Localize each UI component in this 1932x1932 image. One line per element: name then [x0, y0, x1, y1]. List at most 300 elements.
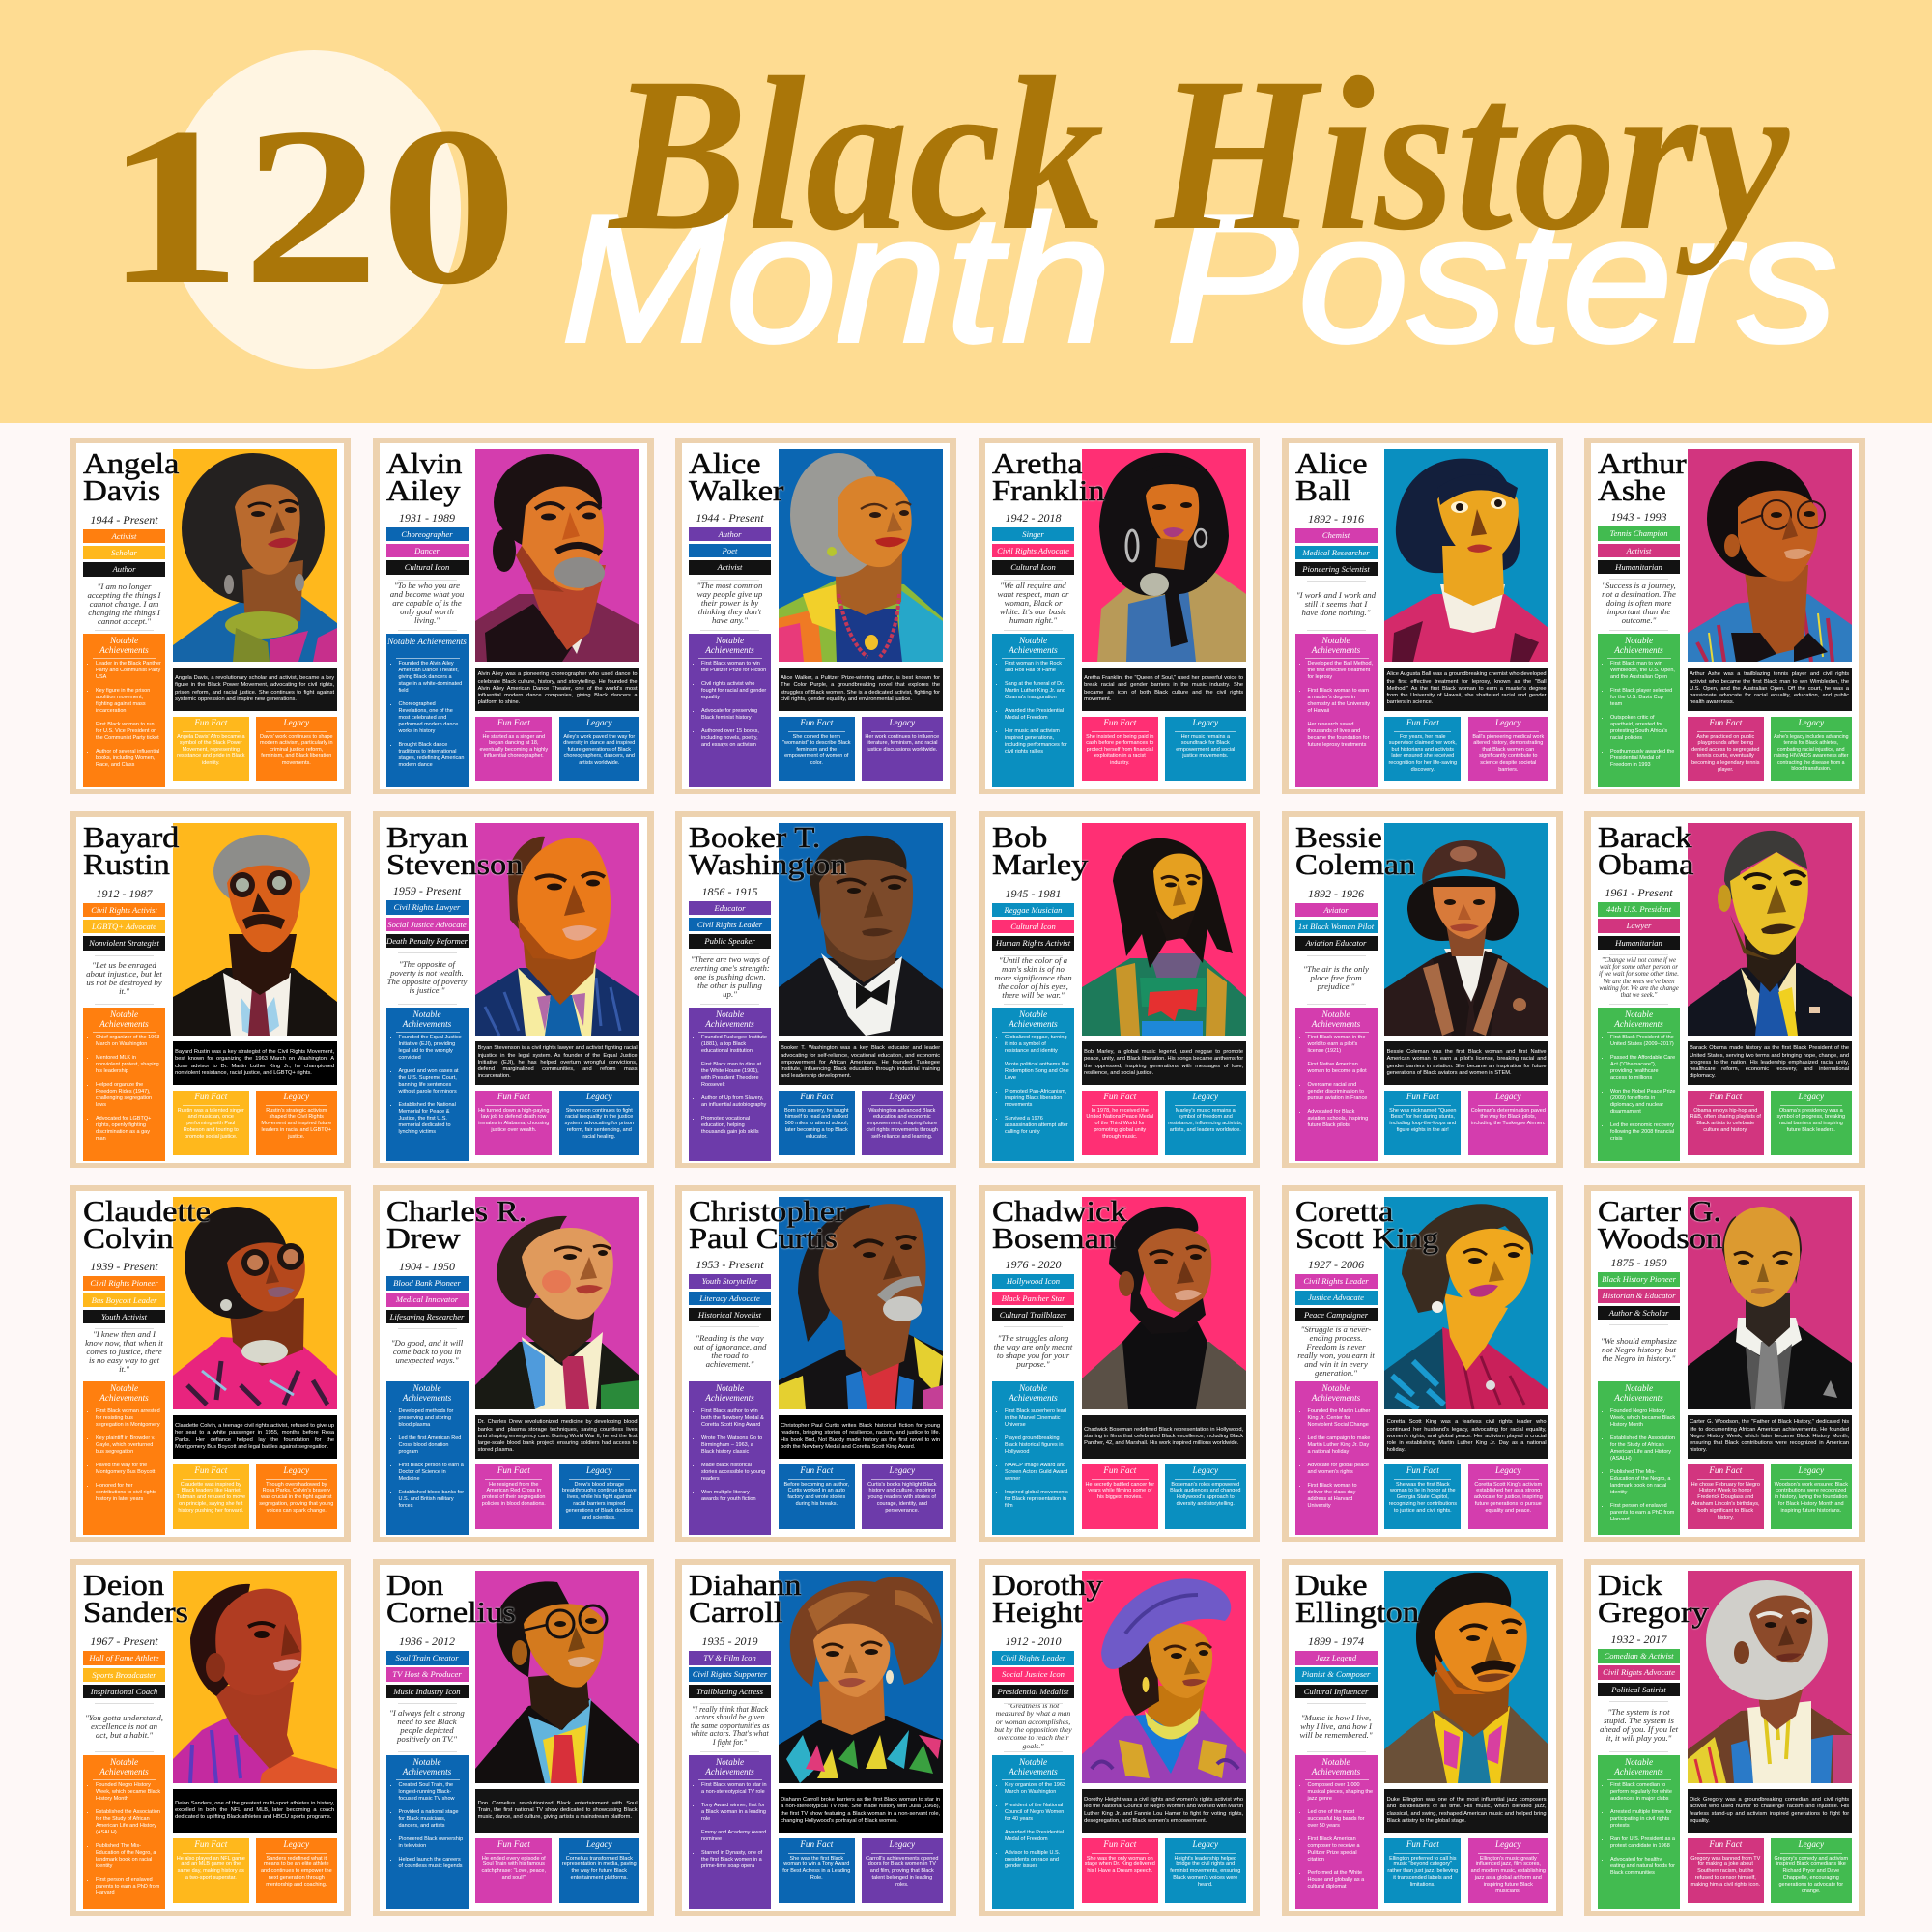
notable achievements: Notable — [1625, 1757, 1653, 1767]
role tags — [689, 527, 771, 575]
fun fact: In 1978, he received the United Nations Peace Medal of the Third World for promoting global unity through music. — [1086, 1107, 1153, 1140]
notable achievements: First Black woman to star in a non-stereotypical TV role — [701, 1781, 767, 1795]
notable achievements: First Black President of the United States (2009–2017) — [1610, 1034, 1674, 1047]
name: Barack — [1598, 820, 1691, 854]
biography: Coretta Scott King was a fearless civil rights leader who continued her husband's legacy, advocating for racial equality, women's rights, and global peace. Her activism played a crucial role in establishing Martin Luther King Jr. Day as a national holiday. — [1387, 1419, 1547, 1453]
notable achievements: Notable — [716, 636, 744, 645]
role tags: Bus Boycott Leader — [92, 1295, 156, 1305]
poster: Chadwick Boseman — [979, 1185, 1260, 1542]
portrait: Diahann Carroll — [779, 1571, 943, 1783]
biography: Duke Ellington was one of the most influential jazz composers and bandleaders of all time. His music, which blended jazz, classical, and swing, reshaped American music and helped bring Black artistry to the global stage. — [1387, 1797, 1547, 1824]
fun fact: Fun Fact — [194, 1839, 227, 1849]
legacy: Legacy — [284, 1839, 309, 1849]
role tags — [386, 1276, 469, 1323]
role tags — [83, 1651, 165, 1698]
legacy: Drew's blood storage breakthroughs continue to save lives, while his fight against racial barriers inspired generations of Black doctors and scientists. — [562, 1482, 637, 1520]
notable achievements — [83, 1755, 165, 1909]
notable achievements: Notable — [716, 1757, 744, 1767]
legacy: Coleman's determination paved the way for Black pilots, including the Tuskegee Airmen. — [1471, 1107, 1546, 1126]
biography — [173, 1415, 337, 1459]
dates: 1942 - 2018 — [1005, 510, 1061, 524]
notable achievements: Made Black historical stories accessible to young readers — [701, 1463, 765, 1482]
notable achievements: Achievements — [1312, 1018, 1360, 1028]
notable achievements: Achievements — [403, 1766, 451, 1776]
role tags — [1598, 902, 1680, 950]
legacy: Legacy — [890, 1465, 915, 1475]
poster: Bessie Coleman — [1281, 811, 1563, 1168]
name: Deion — [83, 1568, 164, 1602]
fun fact: Fun Fact — [194, 718, 227, 727]
quote: "We all require and want respect, man or woman, Black or white. It's our basic human right." — [998, 581, 1068, 625]
notable achievements: Sang at the funeral of Dr. Martin Luther King Jr. and Obama's inauguration — [1005, 680, 1065, 699]
name — [992, 820, 1090, 881]
poster: Deion Sanders — [70, 1559, 351, 1916]
legacy: Legacy — [1799, 1839, 1824, 1849]
name: Bob — [992, 820, 1047, 854]
legacy: Rustin's strategic activism shaped the Civil Rights Movement and inspired future leaders in racial and LGBTQ+ justice. — [261, 1107, 331, 1140]
name — [1598, 1572, 1697, 1625]
name — [1294, 1572, 1406, 1625]
name: Christopher — [689, 1194, 845, 1228]
notable achievements: Key organizer of the 1963 March on Washington — [1005, 1781, 1065, 1795]
fun fact: She was the first Black woman to lie in honor at the Georgia State Capitol, recognizing her contributions to justice and civil rights. — [1389, 1482, 1457, 1514]
legacy: Marley's music remains a symbol of freedom and resistance, influencing activists, artists, and leaders worldwide. — [1168, 1107, 1242, 1133]
notable achievements: First Black person to earn a Doctor of Science in Medicine — [398, 1463, 464, 1482]
name: Rustin — [83, 846, 170, 881]
name: Alice — [1294, 446, 1367, 480]
notable achievements: Mentored MLK in nonviolent protest, shaping his leadership — [96, 1055, 159, 1074]
name: Drew — [386, 1221, 460, 1254]
biography: Alice Walker, a Pulitzer Prize-winning author, is best known for The Color Purple, a groundbreaking novel that explores the struggles of Black women. She is a dedicated activist, fighting for civil rights, gender equality, and environmental justice. — [781, 675, 940, 702]
header banner — [0, 0, 1932, 423]
notable achievements: Ran for U.S. President as a protest candidate in 1968 — [1610, 1835, 1675, 1849]
dates: 1912 - 2010 — [1005, 1634, 1061, 1648]
notable achievements: Chief organizer of the 1963 March on Washington — [96, 1034, 159, 1047]
biography: Bryan Stevenson is a civil rights lawyer and activist fighting racial injustice in the legal system. As founder of the Equal Justice Initiative (EJI), he has helped overturn wrongful convictions, defend marginalized communities, and reform mass incarceration. — [478, 1045, 638, 1079]
biography — [1688, 1789, 1852, 1833]
notable achievements: Inspired global movements for Black representation in film — [1005, 1490, 1068, 1509]
fun fact: Ashe practiced on public playgrounds after being denied access to segregated tennis courts, eventually becoming a legendary tennis player. — [1691, 734, 1759, 773]
name: Dorothy — [992, 1568, 1103, 1602]
notable achievements: Wrote The Watsons Go to Birmingham – 1963, a Black history classic — [701, 1435, 762, 1455]
notable achievements: Helped launch the careers of countless music legends — [398, 1857, 463, 1868]
notable achievements: Notable — [110, 1383, 138, 1393]
role tags: Author — [719, 529, 741, 539]
legacy: Obama's presidency was a symbol of progress, breaking racial barriers and inspiring future Black leaders. — [1776, 1107, 1845, 1133]
role tags: Civil Rights Pioneer — [90, 1278, 158, 1288]
biography: Carter G. Woodson, the "Father of Black History," dedicated his life to documenting African American achievements. He founded Negro History Week, which later became Black History Month, ensuring that Black contributions were recognized in American history. — [1690, 1419, 1849, 1453]
legacy: Legacy — [1193, 718, 1218, 727]
name: Claudette — [83, 1194, 211, 1228]
role tags — [689, 1651, 771, 1701]
role tags: Tennis Champion — [1609, 528, 1668, 538]
fun fact: Rustin was a talented singer and musician, once performing with Paul Robeson and touring to promote social justice. — [178, 1107, 244, 1140]
legacy: Legacy — [586, 1839, 612, 1849]
role tags: Cultural Icon — [1010, 562, 1056, 572]
notable achievements: Achievements — [1614, 645, 1663, 655]
notable achievements: Established the National Memorial for Peace & Justice, the first U.S. memorial dedicated to lynching victims — [398, 1101, 456, 1134]
role tags — [83, 903, 165, 951]
poster: Duke Ellington — [1281, 1559, 1563, 1916]
role tags: Hall of Fame Athlete — [89, 1653, 159, 1662]
name: Bayard — [83, 820, 179, 854]
notable achievements — [992, 634, 1074, 787]
name — [688, 820, 848, 883]
role tags: Aviation Educator — [1306, 938, 1366, 948]
notable achievements — [689, 1755, 771, 1909]
role tags: Humanitarian — [1615, 938, 1662, 948]
quote: "I really think that Black actors should be given the same opportunities as white actors. That's what I fight for." — [690, 1705, 769, 1747]
biography: Deion Sanders, one of the greatest multi-sport athletes in history, excelled in both the NFL and MLB, later becoming a coach dedicated to uplifting Black athletes and HBCU sports programs. — [175, 1801, 334, 1820]
notable achievements: Globalized reggae, turning it into a symbol of resistance and identity — [1005, 1034, 1067, 1053]
notable achievements: Posthumously awarded the Presidential Medal of Freedom in 1993 — [1610, 748, 1674, 767]
poster: Alice Walker — [675, 438, 956, 794]
notable achievements — [386, 634, 468, 787]
legacy: Ailey's work paved the way for diversity in dance and inspired future generations of Black choreographers, dancers, and artists worldwide. — [563, 734, 635, 766]
biography — [475, 1789, 639, 1833]
role tags: Historical Novelist — [698, 1310, 761, 1320]
legacy — [862, 717, 943, 781]
fun fact — [1082, 717, 1158, 781]
dates: 1945 - 1981 — [1005, 887, 1061, 900]
notable achievements — [992, 1381, 1074, 1535]
legacy: Legacy — [284, 1465, 309, 1475]
notable achievements: Emmy and Academy Award nominee — [701, 1830, 766, 1841]
portrait: Christopher Paul Curtis — [779, 1197, 943, 1409]
legacy: Davis' work continues to shape modern activism, particularly in criminal justice reform, feminism, and Black liberation movements. — [260, 734, 333, 766]
biography — [173, 668, 337, 711]
biography: Aretha Franklin, the "Queen of Soul," used her powerful voice to break racial and gender barriers in the music industry. She became an icon of both Black culture and the civil rights movement. — [1084, 675, 1243, 702]
dates: 1976 - 2020 — [1005, 1258, 1061, 1271]
legacy: Ellington's music greatly influenced jazz, film scores, and modern music, establishing jazz as a global art form and inspiring future Black musicians. — [1471, 1855, 1546, 1894]
fun fact: He chose February for Negro History Week to honor Frederick Douglass and Abraham Lincoln's birthdays, both significant to Black history. — [1691, 1482, 1760, 1520]
name — [83, 446, 180, 506]
legacy — [1468, 1838, 1548, 1903]
role tags: 1st Black Woman Pilot — [1298, 922, 1374, 931]
legacy: Though overshadowed by Rosa Parks, Colvin's bravery was crucial in the fight against segregation, proving that young voices can spark change. — [259, 1482, 333, 1514]
notable achievements: Achievements — [705, 645, 754, 655]
biography: Diahann Carroll broke barriers as the first Black woman to star in a non-stereotypical TV role. She made history with Julia (1968), the first TV show featuring a Black woman in a non-servant role, changing Hollywood's portrayal of Black women. — [781, 1797, 940, 1824]
notable achievements: Passed the Affordable Care Act ("Obamacare"), providing healthcare access to millions — [1610, 1055, 1675, 1080]
role tags — [1598, 526, 1680, 574]
fun fact: Fun Fact — [800, 718, 833, 727]
legacy — [1468, 717, 1548, 781]
notable achievements: Notable — [1321, 1757, 1350, 1767]
name: Charles R. — [386, 1194, 526, 1228]
legacy — [256, 1838, 337, 1903]
notable achievements: Provided a national stage for Black musicians, dancers, and artists — [398, 1808, 459, 1828]
dates: 1892 - 1916 — [1308, 512, 1364, 526]
notable achievements: Advocate for preserving Black feminist history — [701, 707, 757, 721]
legacy — [1165, 1091, 1246, 1155]
biography — [173, 1789, 337, 1833]
fun fact: She was the first Black woman to win a Tony Award for Best Actress in a Leading Role. — [782, 1855, 850, 1881]
notable achievements: Performed at the White House and globally as a cultural diplomat — [1308, 1870, 1364, 1889]
legacy: Legacy — [890, 1092, 915, 1101]
notable achievements: Notable — [412, 1009, 441, 1019]
role tags: Cultural Icon — [1010, 922, 1056, 931]
name — [689, 1572, 790, 1625]
notable achievements: Founded the Alvin Ailey American Dance Theater, giving Black dancers a stage in a white-dominated field — [398, 661, 462, 694]
name: Ball — [1294, 473, 1350, 506]
role tags: Blood Bank Pioneer — [393, 1278, 461, 1288]
role tags: Youth Activist — [101, 1312, 147, 1321]
portrait: Deion Sanders — [173, 1571, 337, 1783]
fun fact — [1688, 1464, 1764, 1528]
role tags: Scholar — [111, 548, 137, 557]
fun fact: For years, her male supervisor claimed her work, but historians and activists later ensured she received recognition for her life-saving discovery. — [1388, 734, 1457, 773]
notable achievements — [386, 1381, 468, 1535]
notable achievements: Created Soul Train, the longest-running Black-focused music TV show — [398, 1781, 454, 1801]
fun fact — [1688, 1838, 1764, 1903]
name — [83, 1568, 189, 1629]
notable achievements: Notable — [412, 1757, 441, 1767]
notable achievements: Achievements — [1312, 1766, 1360, 1776]
legacy — [558, 1464, 639, 1528]
poster: Arthur Ashe — [1584, 438, 1865, 794]
portrait: Duke Ellington — [1384, 1571, 1548, 1783]
role tags: Author — [113, 564, 135, 574]
name: Coretta — [1294, 1194, 1393, 1228]
role tags: Nonviolent Strategist — [89, 938, 159, 948]
name — [1294, 820, 1416, 881]
biography: Alvin Ailey was a pioneering choreographer who used dance to celebrate Black culture, history, and storytelling. He founded the Alvin Ailey American Dance Theater, one of the world's most influential modern dance companies, giving Black dancers a platform to shine. — [478, 671, 638, 705]
role tags: Literacy Advocate — [699, 1293, 760, 1303]
biography — [1082, 1415, 1246, 1459]
role tags: Peace Campaigner — [1304, 1310, 1368, 1320]
legacy — [1468, 1464, 1548, 1528]
name: Don — [386, 1568, 443, 1602]
notable achievements — [689, 634, 771, 787]
role tags: Pianist & Composer — [1302, 1669, 1370, 1679]
notable achievements: First Black comedian to perform regularly for white audiences in major clubs — [1610, 1781, 1672, 1801]
portrait: Angela Davis — [173, 449, 337, 662]
portrait: Dorothy Height — [1082, 1571, 1246, 1783]
name: Coleman — [1294, 846, 1415, 881]
legacy: Legacy — [1495, 1092, 1521, 1101]
fun fact: Fun Fact — [1406, 1092, 1439, 1101]
quote: "The system is not stupid. The system is ahead of you. If you let it, it will play you." — [1600, 1707, 1678, 1743]
name — [992, 446, 1105, 506]
poster: Dick Gregory — [1584, 1559, 1865, 1916]
fun fact: Fun Fact — [497, 1465, 530, 1475]
name: Alice — [689, 446, 761, 480]
portrait: Bryan Stevenson — [475, 823, 639, 1036]
role tags: Social Justice Advocate — [387, 920, 467, 929]
legacy: Ball's pioneering medical work altered history, demonstrating that Black women can significantly contribute to science despite societal barriers. — [1472, 734, 1544, 773]
poster: Charles R. Drew — [373, 1185, 653, 1542]
notable achievements: Achievements — [1614, 1766, 1663, 1776]
notable achievements: Tony Award winner, first for a Black woman in a leading role — [701, 1803, 766, 1822]
notable achievements: Achievements — [1009, 1393, 1058, 1403]
quote: "Struggle is a never-ending process. Freedom is never really won, you earn it and win it in every generation." — [1297, 1323, 1375, 1378]
notable achievements: Notable — [1625, 1009, 1653, 1019]
legacy: Height's leadership helped bridge the civil rights and feminist movements, ensuring Black women's voices were heard. — [1170, 1855, 1240, 1888]
notable achievements: Published The Mis-Education of the Negro, a landmark book on racial identity — [96, 1843, 156, 1868]
notable achievements: Helped organize the Freedom Rides (1947), challenging segregation laws — [96, 1082, 152, 1107]
role tags: Social Justice Icon — [1002, 1669, 1065, 1679]
poster: Christopher Paul Curtis — [675, 1185, 956, 1542]
legacy: Cornelius transformed Black representation in media, paving the way for future Black entertainment platforms. — [562, 1855, 637, 1881]
notable achievements: Outspoken critic of apartheid, arrested for protesting South Africa's racial policies — [1610, 715, 1667, 740]
dates: 1904 - 1950 — [399, 1260, 455, 1273]
notable achievements: Led the economic recovery following the 2008 financial crisis — [1610, 1122, 1674, 1142]
role tags: Civil Rights Supporter — [693, 1669, 767, 1679]
legacy — [1165, 1464, 1246, 1528]
notable achievements — [83, 1381, 165, 1535]
role tags: Medical Researcher — [1302, 548, 1370, 557]
dates: 1953 - Present — [696, 1258, 764, 1271]
biography: Claudette Colvin, a teenage civil rights activist, refused to give up her seat to a white passenger in 1955, months before Rosa Parks. Her defiance helped lay the foundation for the Montgomery Bus Boycott and legal battles against segregation. — [175, 1423, 334, 1450]
name: Angela — [83, 446, 179, 480]
fun fact: He turned down a high-paying law job to defend death row inmates in Alabama, choosing justice over wealth. — [478, 1107, 549, 1133]
notable achievements: Achievements — [403, 1018, 451, 1028]
biography: Don Cornelius revolutionized Black entertainment with Soul Train, the first national TV show dedicated to showcasing Black music, dance, and culture, giving artists a mainstream platform. — [478, 1801, 638, 1820]
fun fact: She coined the term "womanist" to describe Black feminism and the empowerment of women of color. — [782, 734, 851, 766]
portrait: Dick Gregory — [1688, 1571, 1852, 1783]
role tags: Pioneering Scientist — [1302, 564, 1370, 574]
notable achievements: Achievements — [1009, 1766, 1058, 1776]
legacy: Carroll's achievements opened doors for Black women in TV and film, proving that Black talent belonged in leading roles. — [866, 1855, 938, 1888]
fun fact: He started as a singer and began dancing at 18, eventually becoming a highly influential choreographer. — [479, 734, 548, 759]
biography — [1082, 1041, 1246, 1085]
role tags — [992, 1651, 1074, 1701]
biography: Bob Marley, a global music legend, used reggae to promote peace, unity, and Black liberation. His songs became anthems for the oppressed, inspiring generations with messages of love, resilience, and social justice. — [1084, 1049, 1243, 1076]
fun fact — [173, 1464, 249, 1528]
fun fact: Fun Fact — [1103, 1092, 1136, 1101]
name: Colvin — [83, 1221, 174, 1254]
quote: "Greatness is not measured by what a man or woman accomplishes, but by the opposition they overcome to reach their goals." — [994, 1701, 1072, 1750]
notable achievements: Notable — [1019, 1009, 1047, 1019]
poster: Bob Marley — [979, 811, 1260, 1168]
name: Height — [992, 1594, 1083, 1629]
quote: "We should emphasize not Negro history, but the Negro in history." — [1601, 1336, 1677, 1363]
fun fact: Fun Fact — [194, 1465, 227, 1475]
name — [83, 820, 180, 881]
notable achievements: First Black woman to win the Pulitzer Prize for Fiction — [701, 661, 766, 672]
name — [688, 446, 785, 506]
dates: 1932 - 2017 — [1611, 1633, 1667, 1646]
notable achievements: Starred in Dynasty, one of the first Black women in a prime-time soap opera — [701, 1849, 762, 1868]
legacy — [862, 1091, 943, 1155]
name: Ailey — [386, 473, 460, 506]
fun fact: She insisted on being paid in cash before performances to protect herself from financial exploitation in a racist industry. — [1086, 734, 1153, 766]
biography: Dorothy Height was a civil rights and women's rights activist who led the National Council of Negro Women and worked with Martin Luther King Jr. and Fannie Lou Hamer to fight for voting rights, desegregation, and Black women's empowerment. — [1084, 1797, 1243, 1824]
name: Bessie — [1294, 820, 1381, 854]
notable achievements: Awarded the Presidential Medal of Freedom — [1005, 707, 1064, 721]
notable achievements: Led one of the most successful big bands for over 50 years — [1308, 1808, 1365, 1828]
dates: 1959 - Present — [393, 884, 461, 897]
biography: Chadwick Boseman redefined Black representation in Hollywood, starring in films that celebrated Black excellence, including Black Panther, 42, and Marshall. His work inspired millions worldwide. — [1084, 1427, 1243, 1446]
name: Davis — [83, 473, 160, 506]
fun fact — [475, 1838, 552, 1903]
legacy — [1165, 1838, 1246, 1903]
legacy — [256, 1091, 337, 1155]
role tags: Youth Storyteller — [702, 1276, 757, 1286]
role tags: LGBTQ+ Advocate — [92, 922, 156, 931]
name: Stevenson — [386, 846, 523, 881]
poster: Bayard Rustin — [70, 811, 351, 1168]
quote: "You gotta understand, excellence is not an act, but a habit." — [85, 1713, 163, 1740]
notable achievements: Notable — [1019, 636, 1047, 645]
biography — [779, 1415, 943, 1459]
legacy: Legacy — [1495, 1839, 1521, 1849]
notable achievements: Notable — [1321, 1383, 1350, 1393]
notable achievements: First woman in the Rock and Roll Hall of Fame — [1005, 661, 1062, 672]
notable achievements — [83, 634, 165, 787]
poster: Barack Obama — [1584, 811, 1865, 1168]
fun fact — [173, 1091, 249, 1155]
notable achievements: Achievements — [99, 645, 149, 655]
dates: 1856 - 1915 — [701, 885, 757, 898]
notable achievements: Founded Negro History Week, which became Black History Month — [96, 1781, 160, 1801]
notable achievements — [386, 1008, 468, 1161]
notable achievements — [1294, 1008, 1378, 1161]
legacy: Legacy — [890, 718, 915, 727]
name: Franklin — [992, 473, 1105, 506]
fun fact — [1082, 1838, 1158, 1903]
biography — [1082, 1789, 1246, 1833]
poster: Aretha Franklin — [979, 438, 1260, 794]
name — [386, 446, 462, 507]
role tags: Trailblazing Actress — [696, 1687, 763, 1696]
poster: Don Cornelius — [373, 1559, 653, 1916]
role tags: Medical Innovator — [396, 1294, 458, 1304]
fun fact: Fun Fact — [1709, 1465, 1742, 1475]
fun fact: Fun Fact — [497, 1092, 530, 1101]
role tags — [83, 529, 165, 577]
legacy — [558, 1838, 639, 1903]
notable achievements: Brought Black dance traditions to international stages, redefining American modern dance — [398, 742, 464, 767]
biography: Christopher Paul Curtis writes Black historical fiction for young readers, bringing stories of resilience, racism, and justice to life. His book Bud, Not Buddy made history as the first novel to win both the Newbery Medal and Coretta Scott King Award. — [781, 1423, 940, 1450]
notable achievements: Published The Mis-Education of the Negro, a landmark book on racial identity — [1610, 1468, 1670, 1495]
fun fact: He resigned from the American Red Cross in protest of their segregation policies in blood donations. — [482, 1482, 546, 1507]
notable achievements: Notable — [716, 1009, 744, 1019]
notable achievements: Wrote political anthems like Redemption Song and One Love — [1005, 1061, 1069, 1080]
notable achievements: Developed the Ball Method, the first effective treatment for leprosy — [1308, 661, 1373, 680]
legacy: Legacy — [1193, 1839, 1218, 1849]
role tags: Civil Rights Leader — [1001, 1653, 1065, 1662]
legacy: Legacy — [586, 1465, 612, 1475]
legacy — [1771, 1091, 1852, 1155]
notable achievements: Founded Negro History Week, which became Black History Month — [1610, 1408, 1675, 1428]
notable achievements: Achievements — [1009, 1018, 1058, 1028]
biography: Booker T. Washington was a key Black educator and leader advocating for self-reliance, vocational education, and economic empowerment for African Americans. He founded Tuskegee Institute, influencing Black education through industrial training and leadership development. — [781, 1045, 940, 1079]
notable achievements: Her music and activism inspired generations, including performances for civil rights rallies — [1005, 728, 1067, 753]
legacy: Legacy — [1799, 718, 1824, 727]
notable achievements: Founded Tuskegee Institute (1881), a top Black educational institution — [701, 1034, 767, 1053]
name — [83, 1194, 211, 1254]
legacy: Legacy — [1193, 1465, 1218, 1475]
notable achievements — [689, 1381, 771, 1535]
notable achievements: NAACP Image Award and Screen Actors Guild Award winner — [1005, 1463, 1067, 1482]
name: Ellington — [1294, 1594, 1419, 1629]
name — [1598, 820, 1694, 881]
notable achievements — [1294, 1381, 1378, 1535]
notable achievements: Won multiple literary awards for youth fiction — [701, 1490, 756, 1501]
fun fact — [779, 1838, 855, 1903]
notable achievements: Established the Association for the Study of African American Life and History (ASALH) — [96, 1808, 160, 1835]
notable achievements: Led the first American Red Cross blood donation program — [398, 1435, 461, 1455]
notable achievements — [1598, 634, 1680, 787]
quote: "The most common way people give up their power is by thinking they don't have any." — [697, 581, 762, 625]
fun fact: He ended every episode of Soul Train with his famous catchphrase: "Love, peace, and soul!" — [482, 1855, 546, 1881]
role tags: TV & Film Icon — [703, 1653, 756, 1662]
notable achievements: Founded the Equal Justice Initiative (EJI), providing legal aid to the wrongly convicted — [398, 1034, 462, 1061]
fun fact: Fun Fact — [1103, 1839, 1136, 1849]
fun fact: Gregory was banned from TV for making a joke about Southern racism, but he refused to censor himself, making him a civil rights icon. — [1690, 1855, 1760, 1888]
dates: 1944 - Present — [696, 510, 764, 524]
